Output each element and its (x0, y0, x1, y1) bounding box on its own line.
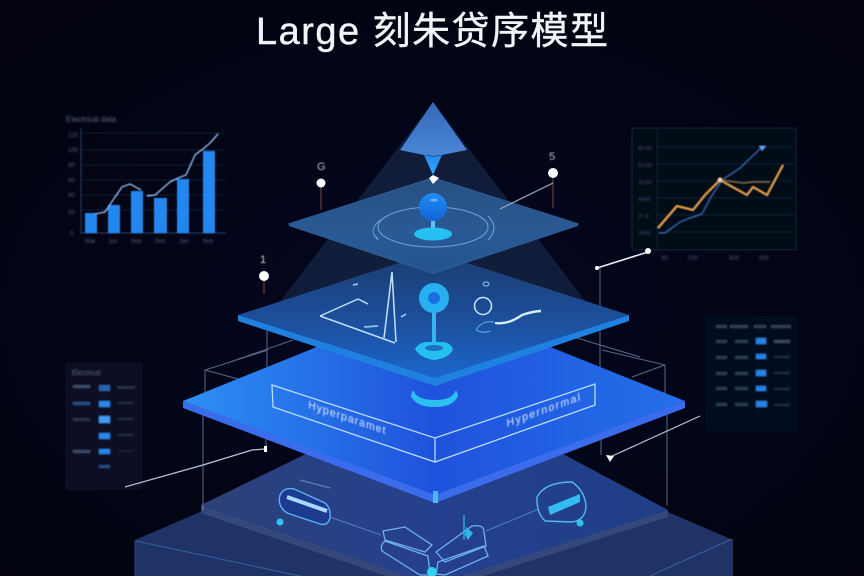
table: left (65, 362, 143, 490)
table labels (716, 340, 748, 406)
pointer dot (645, 248, 651, 254)
table: right (705, 316, 798, 432)
pin stem (432, 310, 436, 346)
pointer line: lower left (125, 446, 267, 487)
icon: centre-right stack (436, 515, 488, 575)
y-axis labels: 90.00 (638, 146, 652, 152)
pointer line: lower right (606, 416, 700, 462)
diamond spark (429, 175, 439, 184)
layer 1 surface (289, 178, 578, 272)
layer 3 inset panel (272, 384, 595, 462)
marker stem (552, 177, 554, 208)
icon: right drop (576, 520, 584, 526)
ball highlight (430, 198, 438, 202)
y-axis labels (638, 146, 652, 237)
y-axis labels: 10.00 (638, 180, 652, 186)
layer 4 surface (201, 454, 668, 576)
x-axis labels: 400 (729, 256, 740, 262)
apex: inverted funnel (400, 102, 467, 184)
icon: centre drop (427, 567, 437, 576)
table labels (73, 385, 90, 453)
x-axis labels: Jan (179, 239, 189, 245)
glyph: right circle (474, 298, 492, 314)
bars (85, 151, 215, 233)
pointer end (264, 446, 267, 452)
pin base (415, 342, 453, 360)
table heading: Electrical (72, 370, 101, 377)
marker stem (320, 187, 322, 210)
table values (774, 340, 790, 406)
x-axis labels: Dec (155, 239, 166, 245)
marker dot (259, 271, 269, 281)
tan series (720, 180, 770, 183)
bar chart: left (66, 115, 226, 245)
chart grid (657, 128, 796, 250)
y-axis labels: 4000 (638, 197, 650, 203)
pin head core (428, 292, 440, 304)
base top (135, 512, 733, 576)
blue series (659, 147, 762, 233)
icon: centre-left stack (381, 527, 432, 575)
peak marker (718, 178, 722, 182)
base left edge (134, 540, 136, 576)
layer 1: top layer (289, 178, 578, 274)
layer 3 side (183, 401, 685, 503)
panel text left: Hyperparamet (308, 399, 386, 437)
glyph: right base (476, 322, 494, 332)
layer 1 side (289, 224, 578, 274)
layer 2 side (238, 315, 629, 386)
ball base (414, 228, 452, 240)
pin base inner (425, 345, 443, 351)
glyph: left axis (320, 272, 396, 343)
layer 3 centre tick (433, 491, 438, 503)
table values (117, 386, 135, 452)
blue series arrowhead (759, 146, 766, 151)
table header row (716, 325, 791, 328)
pin head (419, 283, 449, 313)
y-axis labels: 100 (68, 148, 79, 154)
table highlighted cells (756, 338, 767, 407)
pointer stroke (597, 252, 648, 268)
layer 4: storage layer (201, 454, 668, 576)
y-axis labels: 50.00 (638, 163, 652, 169)
glyph: left marks (353, 284, 406, 327)
y-axis labels: 40 (68, 193, 75, 199)
chart grid (82, 133, 226, 210)
callout marker: top left (316, 161, 326, 210)
layer 3 cyan connector (412, 392, 457, 406)
orange series (658, 165, 783, 228)
ball (419, 193, 447, 221)
table panel (705, 316, 798, 432)
wireframe guides (203, 268, 667, 510)
x-axis labels: Nov (203, 239, 214, 245)
chart title: Electrical data (66, 115, 117, 124)
base platform (135, 512, 733, 576)
y-axis labels: 120 (68, 133, 79, 139)
ball stem (431, 218, 435, 232)
apex cone (400, 102, 467, 156)
icon: right data block (537, 482, 586, 522)
y-axis labels: 0 (70, 231, 74, 237)
base highlights (136, 539, 732, 576)
pointer end (595, 266, 599, 270)
x-axis labels: Mar (85, 239, 95, 245)
pointer line: upper right (595, 248, 651, 270)
line chart: right (632, 128, 796, 262)
y-axis labels (68, 133, 79, 237)
marker label: G (317, 161, 326, 173)
y-axis labels: 27.8 (638, 214, 649, 220)
marker dot (548, 168, 558, 178)
translucent pyramid beam (266, 102, 600, 320)
pointer end (606, 455, 614, 462)
panel text right: Hypernormal (506, 392, 581, 430)
marker label: 5 (549, 151, 555, 163)
trend line (95, 134, 218, 214)
icon: left data block (279, 480, 330, 524)
marker stem (263, 280, 265, 294)
chart axes (81, 128, 226, 233)
glyph: small ring (483, 282, 489, 286)
layer 2 surface (238, 252, 629, 378)
y-axis labels: 7000 (638, 231, 650, 237)
callout marker: middle left (259, 254, 269, 294)
icon: left drop (276, 518, 284, 526)
y-axis labels: 20 (68, 210, 75, 216)
x-axis labels: 200 (688, 256, 699, 262)
glyph: right swoosh (495, 311, 541, 323)
title: Large 刻朱贷序模型 (256, 11, 608, 53)
layer 3 surface (183, 300, 685, 495)
y-axis labels: 60 (68, 178, 75, 184)
x-axis labels: 500 (759, 256, 770, 262)
callout marker: top right (500, 151, 558, 209)
marker pointer (500, 183, 553, 209)
table panel (65, 362, 143, 490)
table highlighted cells (99, 385, 110, 468)
layer 3: blue slab (183, 300, 685, 503)
x-axis labels (85, 239, 214, 245)
y-axis labels: 80 (68, 163, 75, 169)
connector lines (330, 509, 539, 535)
rings (373, 207, 494, 247)
icon: centre peg (465, 527, 473, 540)
x-axis labels (661, 256, 770, 262)
x-axis labels: Jun (108, 239, 118, 245)
x-axis labels: Sep (131, 239, 142, 245)
pointer stroke (125, 449, 265, 487)
pointer stroke (610, 416, 700, 457)
layer 2: model layer (238, 252, 629, 386)
marker dot (316, 178, 326, 188)
marker label: 1 (260, 254, 266, 266)
x-axis labels: 50 (661, 256, 668, 262)
chart frame (632, 128, 796, 250)
layer 4 side (201, 505, 668, 576)
funnel (424, 155, 442, 175)
